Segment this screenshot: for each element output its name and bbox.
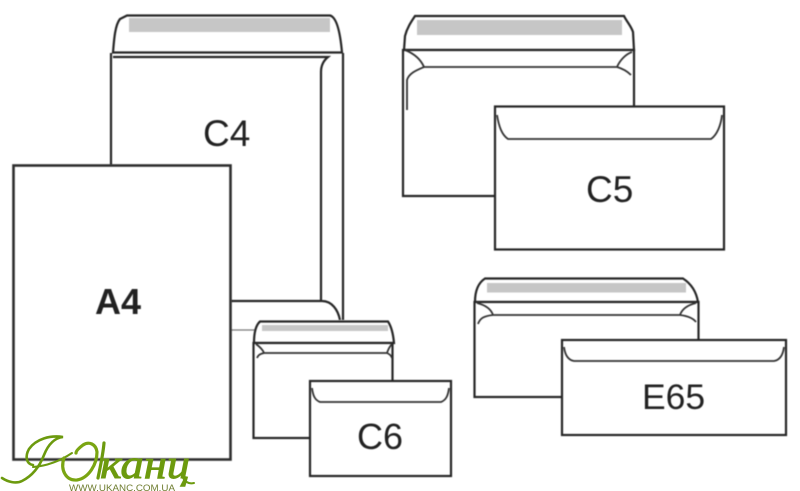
- envelope C5 front: [495, 106, 724, 250]
- envelope C6 back: [254, 322, 394, 438]
- label C6: C6: [357, 416, 403, 457]
- envelope C5 back: [403, 16, 634, 196]
- label C4: C4: [203, 113, 250, 154]
- C4 flap: [113, 16, 342, 52]
- envelope C6 front: [310, 381, 451, 476]
- logo swashes: [2, 436, 194, 483]
- envelope C4: [111, 16, 343, 330]
- label C5: C5: [586, 169, 633, 210]
- sheet A4: [14, 166, 230, 460]
- label E65: E65: [642, 377, 705, 417]
- logo: Юканц: [2, 436, 194, 491]
- label A4: A4: [95, 281, 141, 322]
- envelope E65 back: [474, 278, 698, 397]
- logo wordmark: канц: [100, 441, 190, 487]
- C4 body: [111, 53, 343, 320]
- envelope E65 front: [562, 340, 786, 435]
